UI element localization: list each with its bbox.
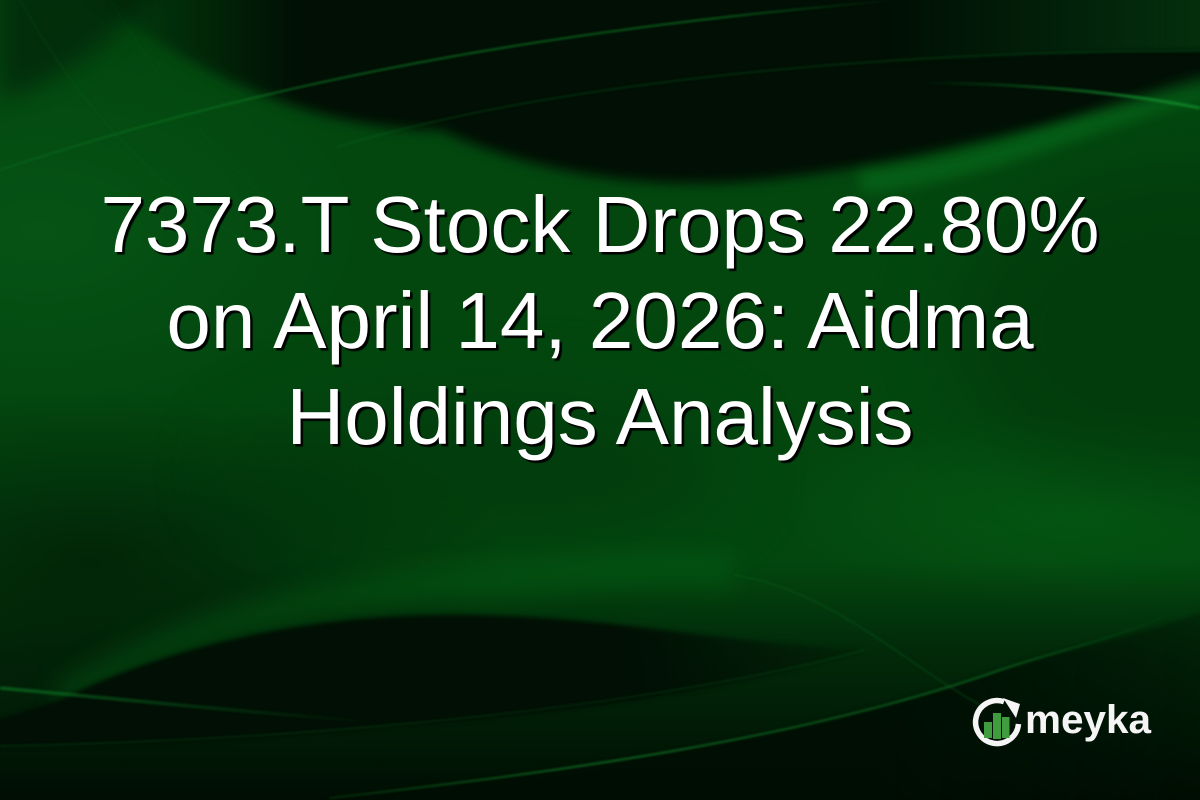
title: Holdings Analysis xyxy=(286,372,914,461)
title: 7373.T Stock Drops 22.80% xyxy=(100,180,1100,269)
title: on April 14, 2026: Aidma xyxy=(166,276,1034,365)
bottom dark lens xyxy=(0,615,865,746)
top right bright glow xyxy=(860,85,1200,182)
bottom fade xyxy=(0,560,1200,800)
bottom strands xyxy=(0,575,1170,798)
bottom wave glow xyxy=(60,571,734,700)
soft tonal blobs xyxy=(0,40,360,420)
logo: meyka xyxy=(972,698,1152,746)
top strands xyxy=(0,0,1200,250)
title xyxy=(100,180,1100,464)
top dark swoosh xyxy=(70,0,1200,183)
top right lighter band xyxy=(880,0,1200,64)
icon: circular arrow with bars xyxy=(976,698,1020,744)
wordmark: meyka xyxy=(1025,698,1152,742)
dark below bright strand xyxy=(329,610,1200,800)
top-left darker corner xyxy=(0,0,160,100)
